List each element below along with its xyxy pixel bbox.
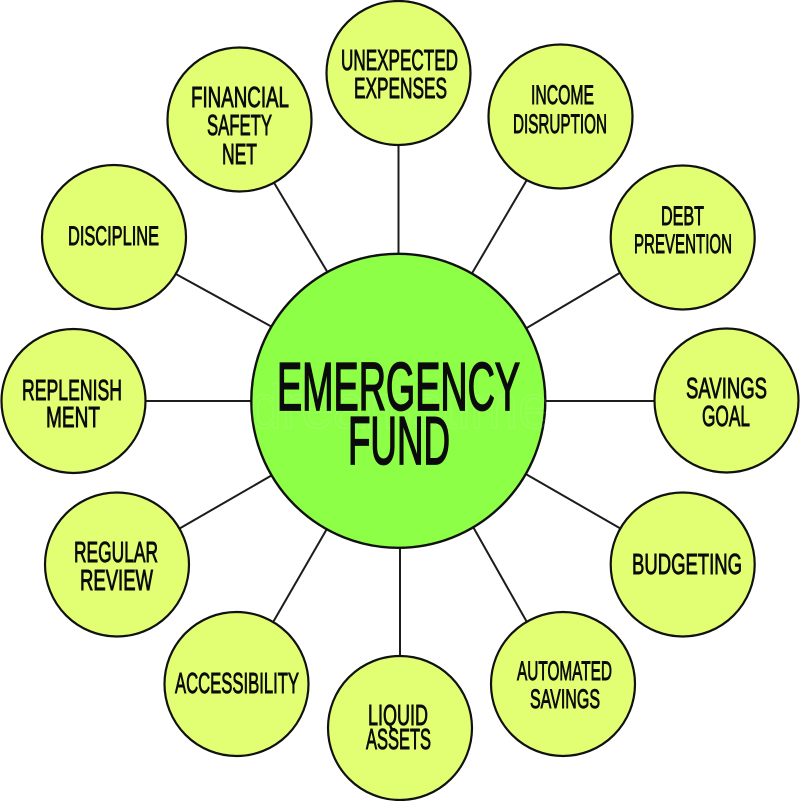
- node: Accessibility: [164, 612, 308, 756]
- node: Budgeting: BUDGETING: [632, 549, 742, 581]
- central title: FUND: [348, 403, 450, 479]
- node: Savings Goal: [654, 328, 798, 472]
- node: Liquid Assets: [328, 656, 472, 800]
- node: Income Disruption: [488, 44, 632, 188]
- node: Automated Savings: AUTOMATED: [517, 656, 612, 686]
- node: Financial Safety Net: NET: [222, 139, 257, 171]
- node: Debt Prevention: DEBT: [661, 201, 704, 231]
- node: Regular Review: [45, 492, 189, 636]
- node: Financial Safety Net: [168, 48, 312, 192]
- node: Automated Savings: SAVINGS: [530, 684, 600, 714]
- node: Regular Review: REGULAR: [74, 537, 158, 569]
- node: Discipline: [42, 165, 186, 309]
- node: Income Disruption: INCOME: [531, 80, 594, 110]
- node: Unexpected Expenses: EXPENSES: [354, 73, 447, 105]
- node: Savings Goal: GOAL: [702, 401, 750, 433]
- node: Liquid Assets: ASSETS: [366, 724, 431, 756]
- central title: [277, 349, 520, 479]
- node: Liquid Assets: LIQUID: [368, 700, 428, 732]
- node: Unexpected Expenses: UNEXPECTED: [341, 45, 458, 77]
- node: Financial Safety Net: SAFETY: [207, 110, 272, 142]
- node: Automated Savings: [491, 612, 635, 756]
- node: Budgeting: [611, 492, 755, 636]
- node: Financial Safety Net: FINANCIAL: [191, 82, 289, 114]
- connector spokes: [141, 140, 660, 660]
- central hub: Emergency Fund: [250, 254, 550, 548]
- node: Regular Review: REVIEW: [80, 565, 153, 597]
- watermark: dreamstime: [250, 373, 550, 442]
- node: Income Disruption: DISRUPTION: [513, 109, 607, 139]
- node: Debt Prevention: [611, 166, 755, 310]
- node: Replenishment: REPLENISH: [22, 375, 122, 407]
- node: Discipline: DISCIPLINE: [68, 221, 159, 251]
- central title: EMERGENCY: [277, 349, 520, 425]
- node: Unexpected Expenses: [326, 1, 470, 145]
- node: Accessibility: ACCESSIBILITY: [175, 668, 299, 700]
- node: Replenishment: [2, 329, 146, 473]
- node: Replenishment: MENT: [46, 402, 100, 434]
